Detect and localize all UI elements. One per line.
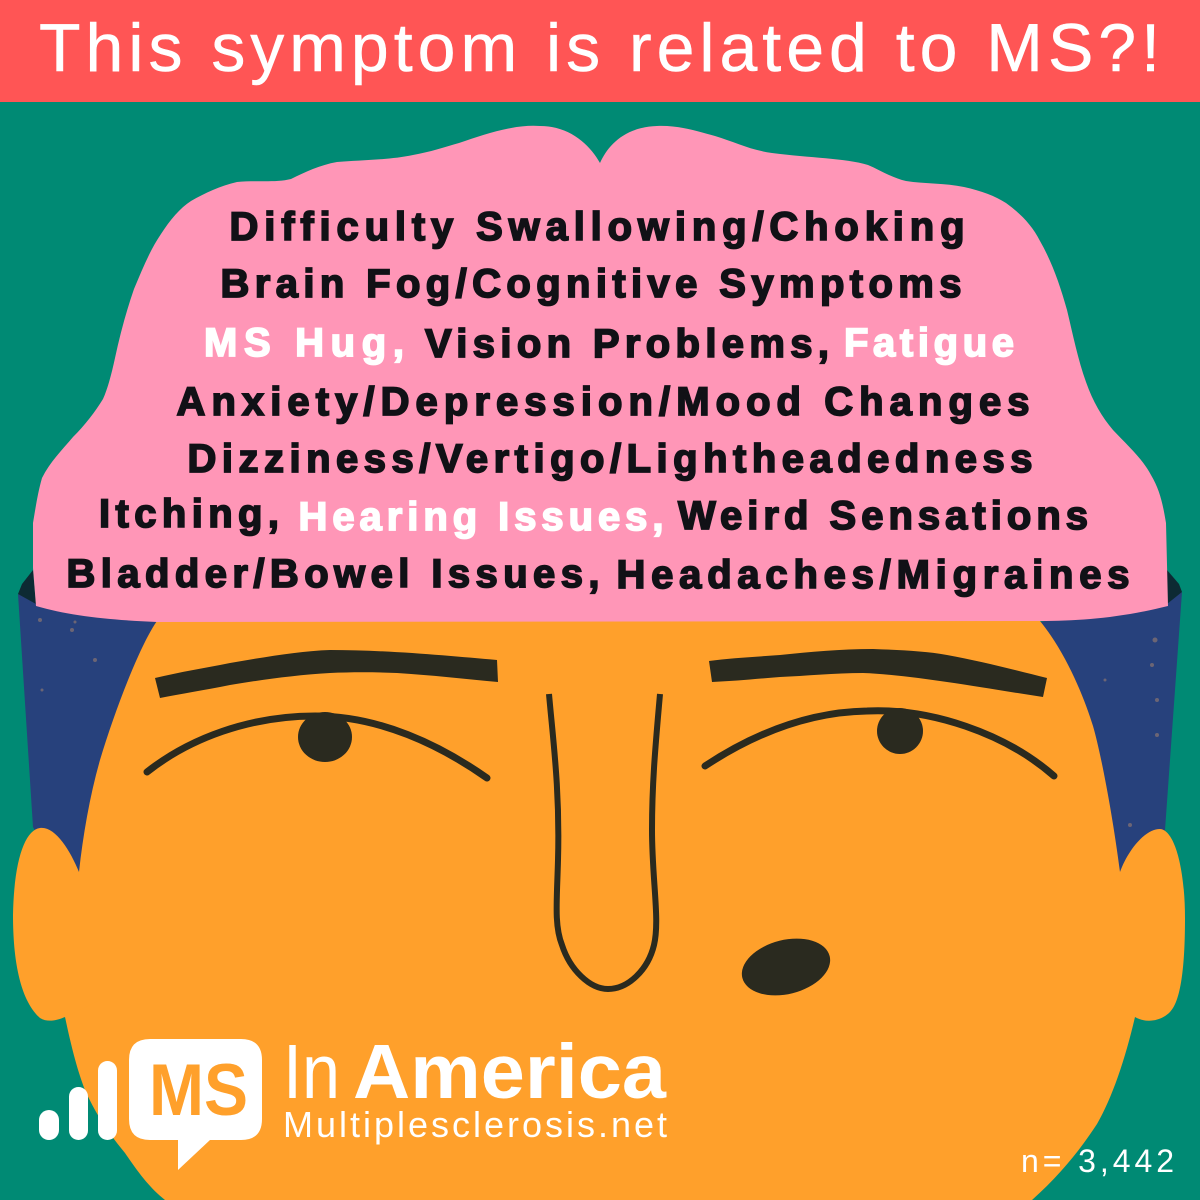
right ear [1100,829,1185,1021]
symptom list: MS Hug, [204,321,404,365]
symptom list: Hearing Issues, [298,495,664,539]
logo speech bubble [129,1039,262,1170]
logo America: America [353,1029,667,1115]
right eyebrow [709,649,1047,697]
symptom list: Bladder/Bowel Issues, [66,552,600,596]
symptom list: Itching, [99,492,279,536]
logo bars [39,1061,117,1140]
logo MS letters: MS [149,1050,248,1131]
title banner: This symptom is related to MS?! [39,10,1160,86]
sample size: n= 3,442 [1021,1143,1174,1179]
symptom list: Vision Problems, [425,322,829,366]
logo: MS In America [39,1029,667,1170]
logo In: In [283,1029,340,1115]
symptom list: Fatigue [844,321,1014,365]
symptom list: Weird Sensations [678,494,1088,538]
exposed brain [33,126,1168,622]
symptom list: Difficulty Swallowing/Choking [230,205,964,249]
nose [549,694,660,989]
symptom list: Dizziness/Vertigo/Lightheadedness [188,437,1032,481]
title banner [0,0,1200,102]
logo site name: Multiplesclerosis.net [283,1104,667,1145]
symptom list: Headaches/Migraines [616,553,1130,597]
symptom list: Anxiety/Depression/Mood Changes [176,380,1030,424]
head [65,621,1135,1200]
left ear [13,828,100,1021]
symptom list [66,205,1130,597]
symptom list: Brain Fog/Cognitive Symptoms [220,262,962,306]
hair [18,570,1182,880]
mouth [736,930,836,1004]
left eyebrow [155,650,498,698]
right eye [705,708,1054,776]
left eye [147,712,487,778]
